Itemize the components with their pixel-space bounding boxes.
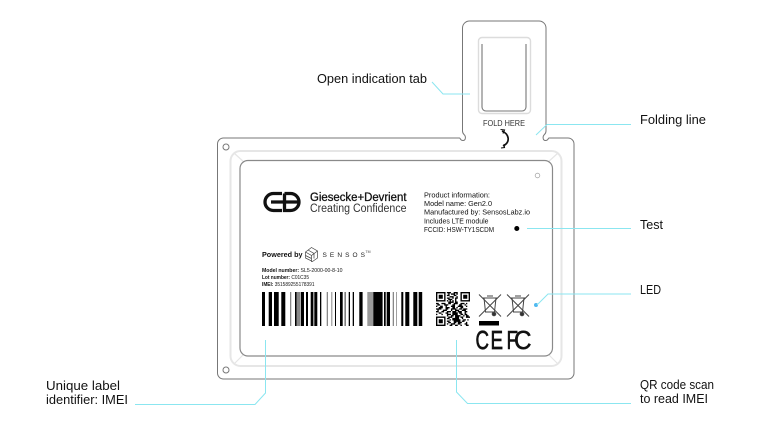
callout: open indication tab: [317, 71, 470, 94]
identifier lines: Model number: SL5-2000-00-8-10: [262, 268, 342, 274]
product information block: Product information:: [424, 192, 490, 200]
tagline: Creating Confidence: [310, 203, 406, 215]
callout: QR code: [456, 340, 714, 406]
icon: fold arrow: [500, 130, 508, 148]
callout: test: Test: [640, 217, 663, 232]
icon: crossed bin left: [479, 294, 501, 316]
device outline with fold tab: [218, 21, 574, 379]
identifier lines: IMEI: 351589255178391: [262, 282, 314, 288]
fold here text: FOLD HERE: [483, 119, 525, 128]
FC mark: C: [514, 325, 532, 355]
QR code: [436, 292, 470, 326]
mounting hole top: [223, 144, 229, 150]
callout: folding line: Folding line: [640, 112, 706, 127]
test point: [514, 226, 519, 231]
product information block: FCCID: HSW-TY1SCDM: [424, 227, 494, 234]
gasket frame: [230, 151, 562, 366]
callout: LED: LED: [640, 282, 661, 297]
small indicator ring: [535, 173, 540, 178]
mounting hole bottom: [223, 367, 229, 373]
product information block: [424, 192, 530, 234]
callout: unique label identifier: [46, 340, 266, 407]
identifier lines: [262, 268, 342, 288]
company name: Giesecke+Devrient: [310, 192, 407, 204]
device panel: [218, 21, 574, 379]
icon: crossed bin right: [507, 294, 529, 316]
callout: LED: [537, 282, 661, 305]
callout: open indication tab: Open indication tab: [317, 71, 427, 86]
logo: G+D mark: [265, 194, 299, 210]
powered by text: Powered by: [262, 250, 303, 259]
FC mark: F: [506, 325, 518, 355]
callout: QR code: QR code scan: [640, 377, 714, 392]
CE mark: C: [476, 325, 489, 355]
LED point: [534, 303, 538, 307]
label sticker: [240, 160, 552, 356]
tab window: [478, 38, 530, 114]
identifier lines: Lot number: C01C35: [262, 275, 309, 281]
barcode: [262, 292, 422, 326]
Sensos wordmark: SENSOS: [322, 252, 366, 259]
callout: folding line: [536, 112, 706, 135]
callout: unique label identifier: identifier: IMEI: [46, 392, 128, 407]
callout: QR code: to read IMEI: [640, 391, 708, 406]
FC mark: [506, 325, 532, 355]
callout: unique label identifier: Unique label: [46, 378, 120, 393]
icon: Sensos logo: [306, 248, 318, 262]
trademark: TM: [366, 250, 371, 254]
product information block: Model name: Gen2.0: [424, 201, 492, 208]
CE mark: E: [490, 325, 503, 355]
product information block: Includes LTE module: [424, 218, 489, 226]
CE mark: [476, 325, 503, 355]
black bar under bin: [479, 321, 499, 326]
product information block: Manufactured by: SensosLabz.io: [424, 210, 530, 216]
callout: test: [527, 217, 663, 232]
